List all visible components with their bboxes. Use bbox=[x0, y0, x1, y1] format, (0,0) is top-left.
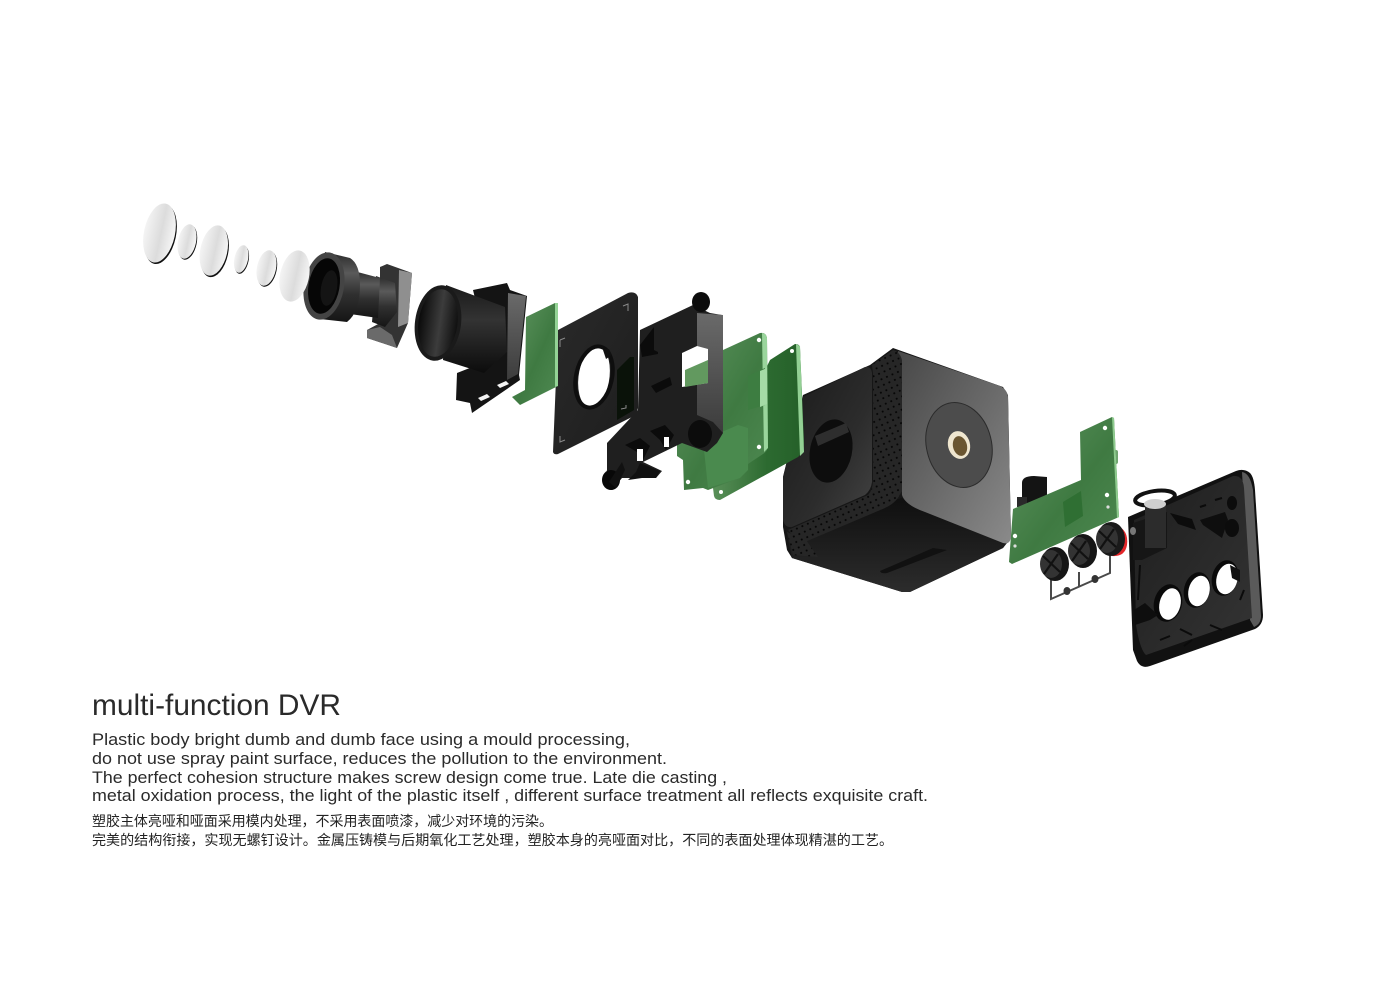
lens 6 bbox=[275, 248, 314, 304]
lower arm bbox=[602, 462, 660, 490]
button 1 bbox=[1040, 547, 1069, 581]
English description: The perfect cohesion structure makes screw design come true. Late die casting , bbox=[92, 768, 727, 787]
English description: do not use spray paint surface, reduces the pollution to the environment. bbox=[92, 749, 667, 768]
holes in back cover bbox=[1150, 557, 1242, 625]
product label bbox=[880, 548, 947, 573]
clips on bracket bbox=[625, 327, 674, 460]
English description: metal oxidation process, the light of the plastic itself , different surface treatment all reflects exquisite craft. bbox=[92, 786, 928, 805]
rear circuit board bbox=[1009, 417, 1119, 564]
aperture ring bbox=[570, 343, 618, 411]
lens bracket bbox=[367, 264, 412, 348]
collar bbox=[372, 276, 397, 327]
sleeve opening bbox=[410, 282, 466, 364]
perforated band bbox=[788, 350, 902, 544]
back cover panel bbox=[1128, 470, 1263, 667]
English description: Plastic body bright dumb and dumb face using a mould processing, bbox=[92, 730, 630, 749]
slot marks on back cover bbox=[1138, 498, 1244, 646]
optical lens elements bbox=[138, 200, 314, 304]
screw posts on back cover bbox=[1170, 496, 1239, 538]
lens 1 bbox=[138, 200, 182, 267]
recess on plate bbox=[617, 357, 634, 420]
English description bbox=[92, 730, 928, 805]
bracket window bbox=[682, 346, 708, 387]
top post on back cover bbox=[1130, 488, 1176, 548]
connector bbox=[1017, 476, 1047, 510]
lower fastener bbox=[688, 420, 712, 448]
main cube housing bbox=[783, 348, 1011, 592]
small lens barrel with holder bbox=[298, 249, 412, 348]
corner alignment marks bbox=[560, 304, 628, 442]
brass thread insert bbox=[945, 429, 973, 461]
lens 2 bbox=[175, 223, 200, 261]
black mounting plate bbox=[553, 292, 638, 454]
lens holder with sleeve bbox=[410, 282, 527, 413]
lens 3 bbox=[195, 223, 233, 280]
recessed front face bbox=[783, 367, 872, 527]
sleeve body bbox=[443, 285, 507, 373]
lens aperture bbox=[804, 415, 858, 487]
upper fastener bbox=[692, 292, 710, 312]
lens 5 bbox=[253, 248, 280, 289]
green board, first layer bbox=[512, 303, 558, 405]
mount disc bbox=[917, 395, 1001, 495]
button 3 bbox=[1096, 522, 1125, 556]
neck bbox=[350, 270, 380, 318]
green board, front layer bbox=[677, 333, 768, 490]
button sprue bbox=[1040, 522, 1127, 599]
Chinese description: 完美的结构衔接，实现无螺钉设计。金属压铸模与后期氧化工艺处理，塑胶本身的亮哑面对比，不同的表面处理体现精湛的工艺。 bbox=[92, 832, 893, 848]
bracket side face bbox=[697, 313, 723, 433]
front ring bbox=[298, 249, 350, 323]
Chinese description bbox=[92, 813, 893, 848]
lens 4 bbox=[232, 244, 251, 275]
bottom face bbox=[786, 498, 1011, 592]
grey side of holder bbox=[507, 293, 526, 380]
barrel body bbox=[320, 252, 360, 322]
black bracket bbox=[602, 292, 723, 490]
exploded view of the DVR bbox=[138, 200, 1263, 667]
button 2 bbox=[1068, 534, 1097, 568]
title: multi-function DVR bbox=[92, 689, 341, 722]
Chinese description: 塑胶主体亮哑和哑面采用模内处理，不采用表面喷漆，减少对环境的污染。 bbox=[92, 813, 553, 829]
green board, rear layer bbox=[712, 344, 804, 500]
mounting feet bbox=[478, 381, 509, 401]
perforated corner bottom bbox=[787, 532, 818, 557]
red indicator bbox=[1112, 525, 1127, 556]
right face bbox=[898, 351, 1011, 543]
